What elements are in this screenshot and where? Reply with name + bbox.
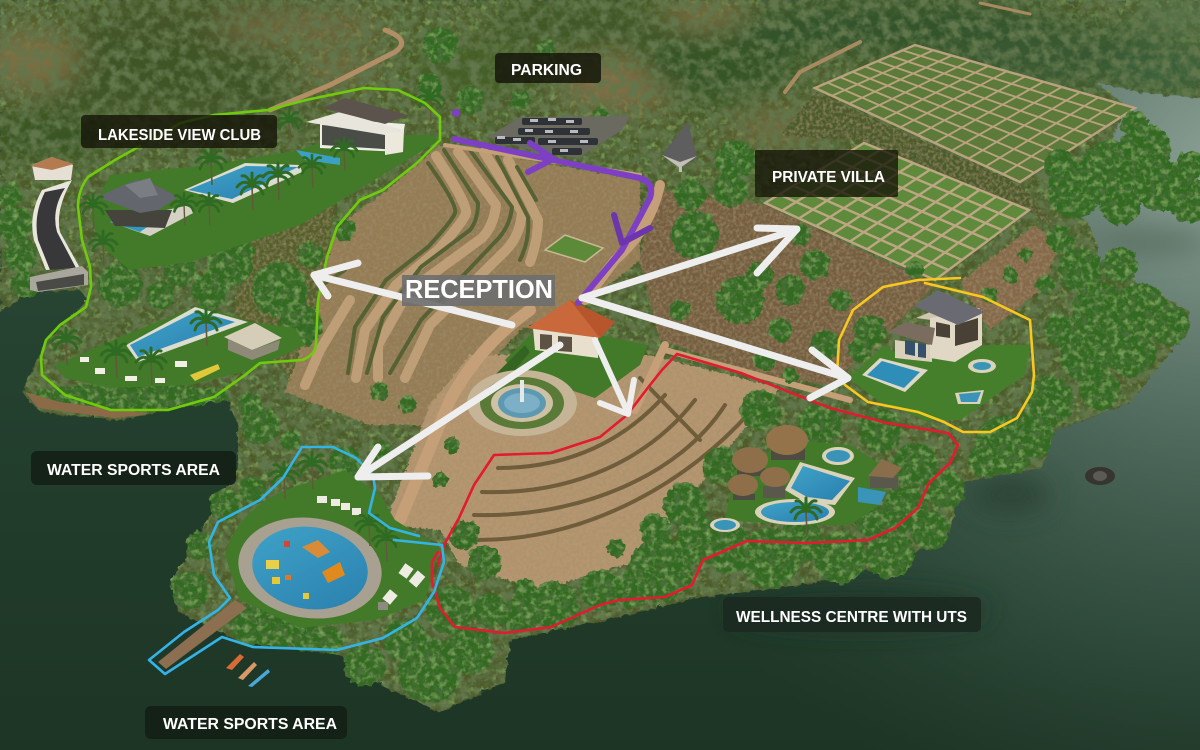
fountain plaza xyxy=(467,370,577,436)
reception building xyxy=(527,300,615,358)
wellness centre lawn, pools and huts xyxy=(710,425,902,535)
zone outline: private villa xyxy=(837,278,1034,432)
label: parking xyxy=(495,53,601,83)
arrow: reception to private plots xyxy=(582,228,797,298)
thatched huts xyxy=(728,425,902,500)
south lawn with pool and lodge xyxy=(25,305,305,418)
zone outline: lakeside view club xyxy=(41,88,440,410)
pools xyxy=(710,447,886,532)
arrow: reception to private villa xyxy=(584,298,848,398)
label: wellness centre with uts: WELLNESS CENTRE WITH UTS xyxy=(736,609,967,626)
farm plot grid, south xyxy=(765,143,1029,280)
label: water sports area, lower xyxy=(145,706,347,739)
terraced slopes, west xyxy=(285,145,640,425)
wooden dock and kayaks xyxy=(158,600,270,687)
label: lakeside view club xyxy=(81,115,277,148)
zone outline: water sports area xyxy=(149,447,444,674)
label: private villa xyxy=(755,150,898,197)
parking lot with cars xyxy=(488,116,630,158)
label: wellness centre with uts xyxy=(723,597,981,632)
villa building xyxy=(888,290,985,362)
label: reception: RECEPTION xyxy=(405,274,553,304)
lakeside view club lawn, pool and buildings xyxy=(79,87,444,270)
label: water sports area, upper: WATER SPORTS AREA xyxy=(47,462,220,479)
arrow: reception to wellness centre xyxy=(595,340,634,414)
dirt roads xyxy=(400,145,850,520)
building: pavilion xyxy=(97,178,178,228)
label: water sports area, upper xyxy=(31,451,236,485)
reception lawn xyxy=(495,335,648,398)
arrow: reception to lakeside view club xyxy=(314,263,512,325)
palms xyxy=(79,87,444,266)
private villa with pool xyxy=(848,290,1030,420)
zone outline: wellness centre xyxy=(432,354,958,633)
water sports lagoon xyxy=(225,452,440,628)
label: lakeside view club: LAKESIDE VIEW CLUB xyxy=(98,127,261,144)
asphalt access road and gatehouse xyxy=(30,157,88,292)
farm plot grid, north xyxy=(815,45,1135,182)
terraced slopes, south-east xyxy=(385,355,780,590)
gable hut xyxy=(662,122,697,172)
label: private villa: PRIVATE VILLA xyxy=(772,169,885,186)
building: main club xyxy=(306,98,408,155)
arrow: reception to water sports area xyxy=(358,345,560,477)
purple route from parking to reception xyxy=(452,109,651,303)
label: parking: PARKING xyxy=(511,62,582,79)
small lawn rectangle xyxy=(545,235,603,262)
brown hillside under villa plots xyxy=(235,92,1060,390)
label: water sports area, lower: WATER SPORTS AREA xyxy=(163,716,337,733)
upper dirt track xyxy=(270,3,1030,110)
